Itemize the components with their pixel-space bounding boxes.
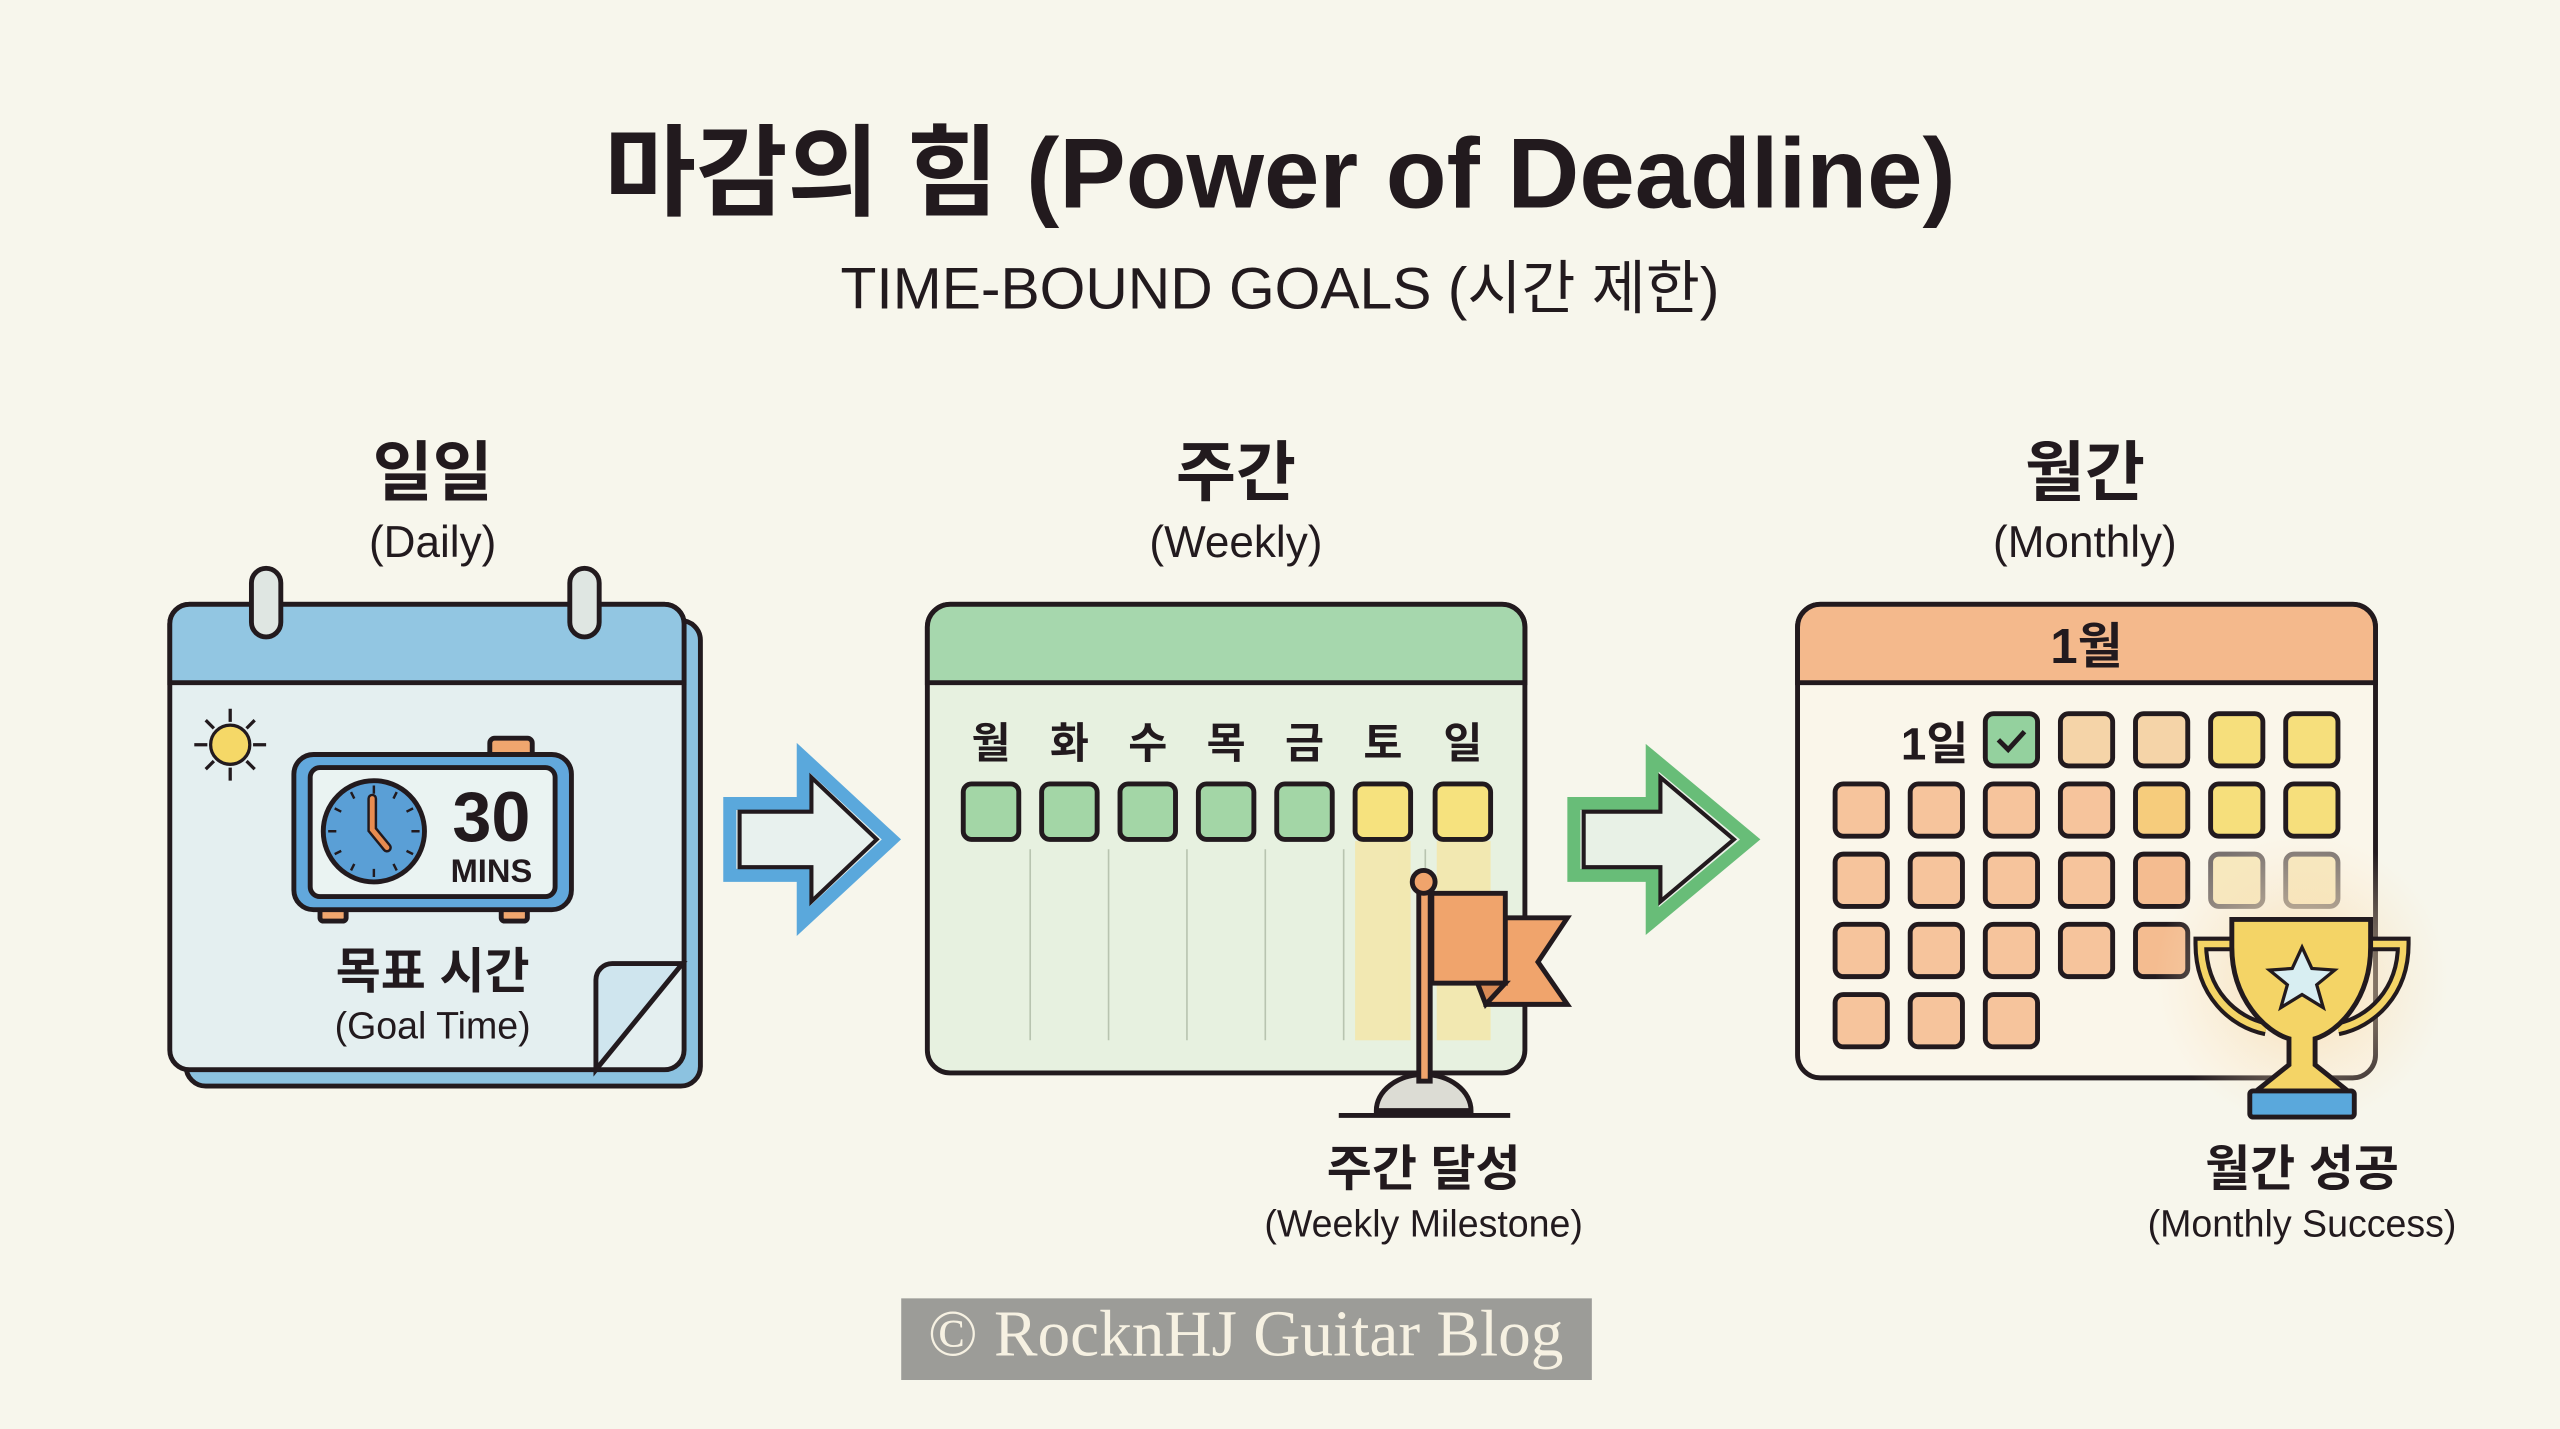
- heading: monthly: [1993, 436, 2177, 567]
- icon: alarm clock: [294, 738, 571, 921]
- icon: alarm clock: MINS: [451, 852, 532, 889]
- icon: sun: [194, 709, 266, 781]
- text: goal time: [335, 945, 531, 1047]
- arrow: blue: [730, 758, 891, 921]
- text: weekly milestone: (Weekly Milestone): [1264, 1202, 1583, 1244]
- month grid: [1835, 714, 2338, 1047]
- text: monthly success: (Monthly Success): [2148, 1202, 2456, 1244]
- text: monthly success: [2148, 1143, 2456, 1244]
- text: goal time: 목표 시간: [336, 945, 530, 999]
- heading: weekly: (Weekly): [1149, 518, 1322, 567]
- icon: page curl: [596, 964, 682, 1070]
- icon: alarm clock: 30: [452, 777, 530, 856]
- title: 마감의 힘 (Power of Deadline): [604, 118, 1956, 229]
- heading: monthly: 월간: [2025, 436, 2145, 509]
- icon: rings: [251, 568, 599, 637]
- heading: weekly: [1149, 436, 1322, 567]
- day labels: 화: [1050, 720, 1089, 767]
- heading: daily: 일일: [373, 436, 493, 509]
- subtitle: TIME-BOUND GOALS (시간 제한): [841, 257, 1719, 322]
- icon: trophy: [2155, 833, 2449, 1127]
- text: goal time: (Goal Time): [335, 1005, 531, 1047]
- text: weekly milestone: [1264, 1143, 1583, 1244]
- heading: weekly: 주간: [1176, 436, 1296, 509]
- panel: monthly calendar: [1798, 604, 2456, 1244]
- heading: daily: (Daily): [369, 518, 496, 567]
- text: weekly milestone: 주간 달성: [1327, 1143, 1521, 1197]
- day labels: 금: [1285, 720, 1324, 767]
- day labels: [971, 720, 1482, 767]
- day labels: 수: [1128, 720, 1167, 767]
- day labels: 토: [1363, 720, 1402, 767]
- panel: weekly calendar: [927, 604, 1583, 1244]
- heading: daily: [369, 436, 496, 567]
- heading: monthly: (Monthly): [1993, 518, 2177, 567]
- panel: monthly calendar: 1월: [2050, 620, 2123, 674]
- day labels: 월: [971, 720, 1011, 767]
- day labels: 목: [1207, 720, 1246, 767]
- icon: flag: [1339, 870, 1567, 1115]
- day labels: 일: [1443, 720, 1482, 767]
- text: monthly success: 월간 성공: [2205, 1143, 2399, 1197]
- panel: monthly calendar: 1일: [1901, 718, 1968, 769]
- day squares: [963, 784, 1491, 839]
- panel: daily calendar: [170, 568, 700, 1086]
- arrow: green: [1574, 758, 1750, 921]
- watermark: © RocknHJ Guitar Blog: [928, 1299, 1563, 1371]
- weekend highlight: [1355, 841, 1491, 1040]
